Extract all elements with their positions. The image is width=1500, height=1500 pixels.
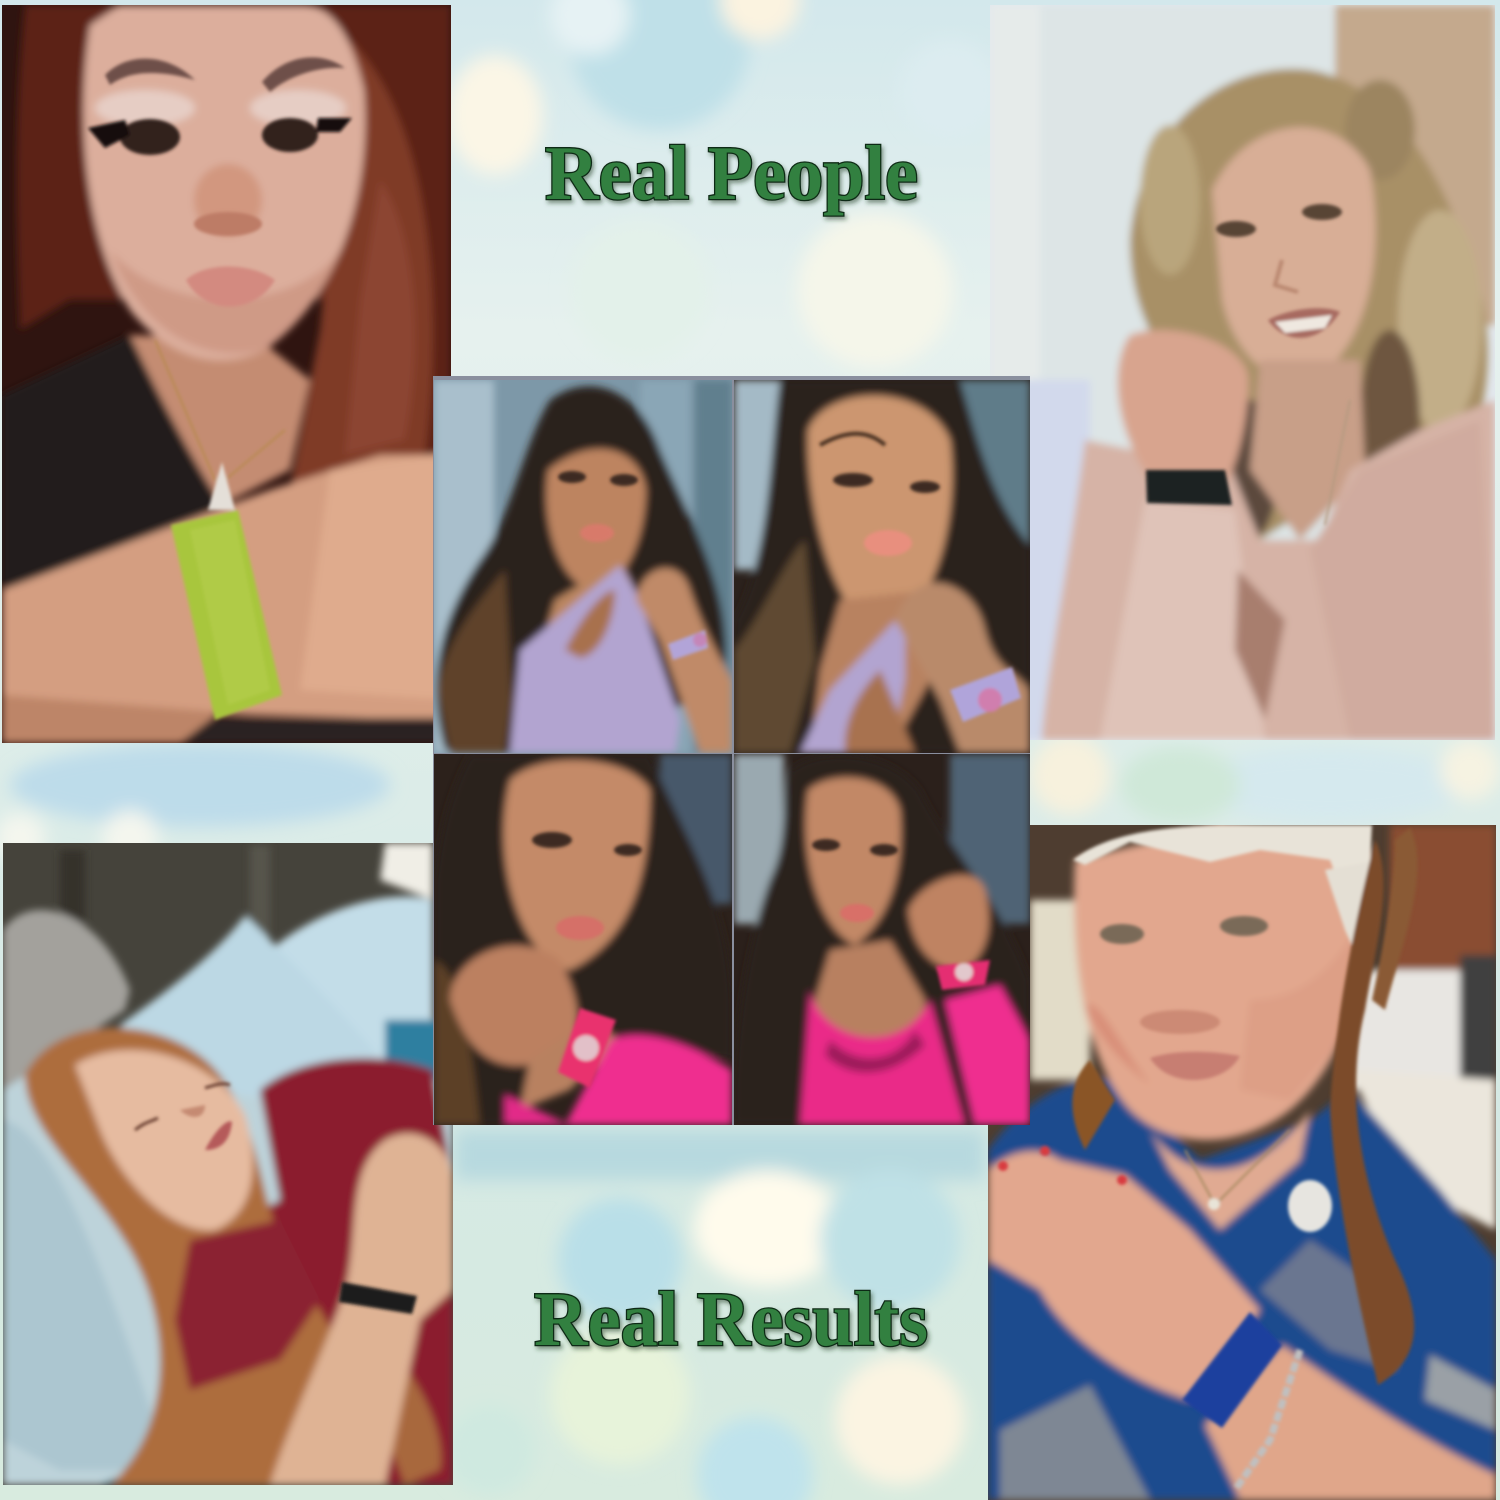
- center collage: four selfies: [433, 376, 1030, 1125]
- photo: woman sleeping with black wristband: [3, 843, 453, 1485]
- selfie: pink top, raised fist: [733, 754, 1030, 1125]
- title: Real Results: Real Results: [534, 1276, 928, 1362]
- selfie: lavender top, small band: [434, 380, 732, 753]
- selfie: pink top, raised wrist: [434, 754, 732, 1125]
- title: Real People: Real People: [545, 130, 918, 216]
- photo: woman with green wristband: [2, 5, 451, 743]
- photo: blonde woman with black wristband: [990, 5, 1495, 740]
- selfie: lavender top, band close-up: [734, 380, 1030, 753]
- photo: woman with EEG cap and blue wristband: [988, 825, 1496, 1500]
